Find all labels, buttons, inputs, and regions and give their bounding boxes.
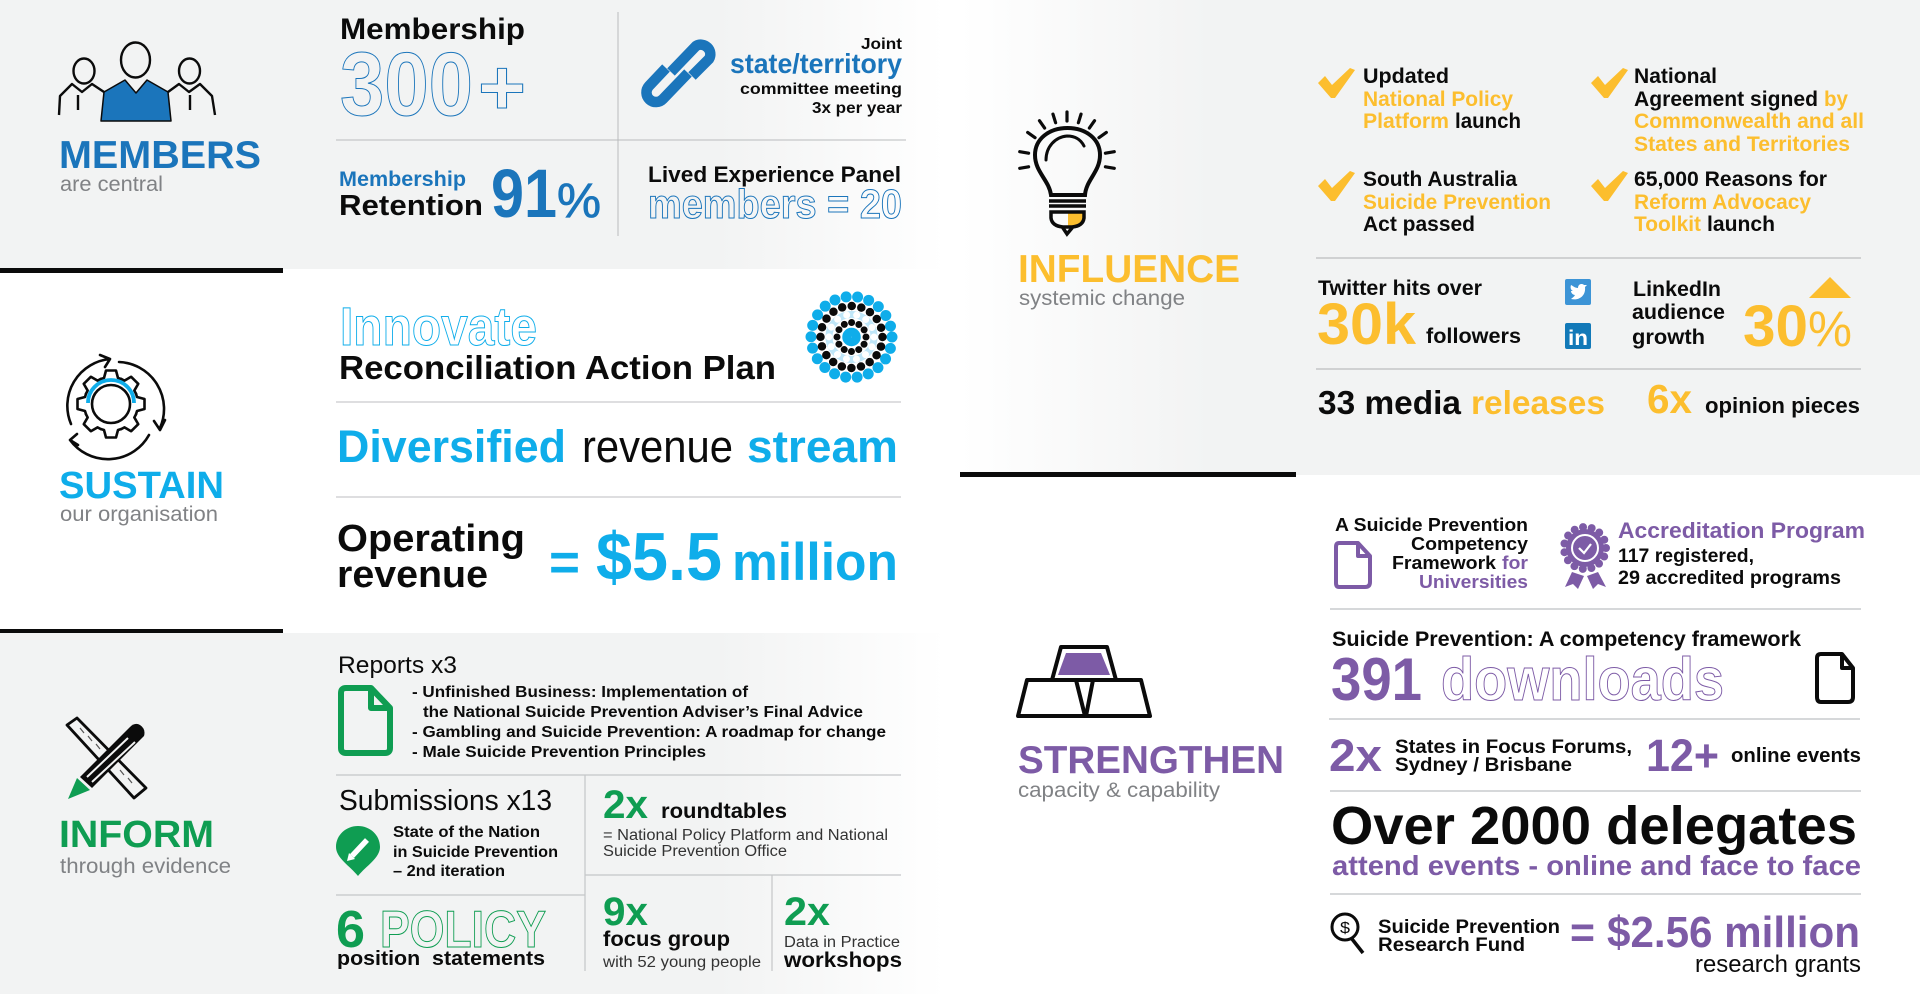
panel: strengthen [1018, 514, 1865, 978]
stat: 9x focus group [602, 890, 761, 971]
item: 65,000 reasons toolkit: Reform Advocacy [1634, 191, 1811, 214]
text: diversified revenue stream: Diversified [337, 421, 566, 472]
text: accreditation program: 117 registered, [1618, 546, 1754, 567]
stat: 6 policy position statements: 6 [336, 901, 365, 959]
item: 65,000 reasons toolkit: Toolkit [1634, 213, 1701, 236]
subheading: our organisation: our organisation [60, 503, 218, 526]
stat: online events [1646, 730, 1861, 781]
stat: operating revenue: $5.5 [596, 519, 722, 595]
stat: research fund: Research Fund [1378, 935, 1525, 956]
panel: inform [0, 633, 945, 994]
icon: check 3 [1318, 171, 1355, 201]
text: state of the nation: – 2nd iteration [393, 863, 505, 880]
stat: operating revenue: Operating [337, 518, 525, 560]
stat: states in focus forums: Sydney / Brisbane [1395, 755, 1572, 776]
panel: sustain [0, 273, 945, 629]
stat: 33 media releases: releases [1471, 384, 1605, 421]
text: joint committee meeting: state/territory [730, 48, 902, 79]
item: national agreement [1634, 65, 1864, 156]
stat: research fund: research grants [1695, 951, 1861, 978]
text: competency framework for universities: for [1502, 552, 1528, 573]
text: state of the nation: State of the Nation [393, 824, 540, 841]
stat: over 2000 delegates: attend events - online and face to face [1332, 850, 1861, 881]
text: diversified revenue stream: revenue [582, 421, 733, 472]
stat: operating revenue [337, 518, 898, 596]
stat: 6x opinion pieces: opinion pieces [1705, 393, 1860, 418]
stat: states in focus forums [1329, 730, 1632, 781]
list: reports: - Gambling and Suicide Prevention: A roadmap for change [412, 724, 886, 741]
stat: 6x opinion pieces: 6x [1647, 376, 1692, 422]
stat: linkedin audience growth: 30 [1743, 294, 1808, 359]
stat: research fund: $2.56 million [1607, 908, 1860, 957]
text: state of the nation [393, 824, 558, 880]
stat: membership 300+ [340, 13, 526, 135]
item: 65,000 reasons toolkit: launch [1707, 213, 1775, 236]
stat: linkedin audience growth: LinkedIn [1633, 278, 1721, 301]
text: innovate reconciliation action plan: Reconciliation Action Plan [339, 349, 776, 386]
stat: 6 policy position statements: position statements [337, 948, 545, 970]
text: joint committee meeting: committee meeting [740, 81, 902, 98]
stat: research fund [1378, 908, 1861, 978]
panel: members [0, 0, 945, 269]
stat: over 2000 delegates: Over 2000 delegates [1331, 796, 1857, 856]
stat: research fund: Suicide Prevention [1378, 917, 1560, 938]
stat: membership retention 91%: Retention [339, 190, 483, 222]
stat: 9x focus group: with 52 young people [602, 954, 761, 971]
item: south australia act: South Australia [1363, 168, 1517, 191]
stat: linkedin audience growth: % [1808, 301, 1852, 357]
icon: gear with arrows [67, 355, 165, 459]
text: diversified revenue stream: stream [747, 421, 898, 472]
text: accreditation program: 29 accredited programs [1618, 568, 1841, 589]
stat: membership 300+: 300 [340, 35, 473, 135]
icon: linkedin [1565, 323, 1591, 350]
text: competency framework for universities: A Suicide Prevention [1335, 514, 1528, 535]
heading: influence: INFLUENCE [1018, 248, 1240, 291]
stat: 2x roundtables: roundtables [661, 800, 787, 823]
text: competency framework for universities: Competency [1411, 533, 1529, 554]
icon: dot artwork circle [811, 296, 892, 378]
text: competency framework for universities: Framework [1392, 552, 1497, 573]
stat: twitter followers [1317, 277, 1521, 357]
text: accreditation program: Accreditation Program [1618, 518, 1865, 543]
item: national policy platform: Platform [1363, 110, 1449, 133]
stat: 2x roundtables: 2x [603, 783, 648, 827]
stat: states in focus forums: 2x [1329, 730, 1382, 781]
stat: membership 300+: Membership [340, 13, 525, 46]
item: national agreement: Commonwealth and all [1634, 110, 1864, 133]
stat: operating revenue: million [732, 533, 898, 592]
text: innovate reconciliation action plan [339, 297, 776, 386]
heading: reports x3: Reports x3 [338, 652, 457, 679]
stat: 2x workshops: Data in Practice [784, 934, 900, 951]
stat: 6x opinion pieces [1647, 376, 1860, 422]
item: national policy platform: National Policy [1363, 88, 1513, 111]
stat: lived experience panel: Lived Experience Panel [648, 162, 901, 187]
stat: 33 media releases [1318, 384, 1605, 421]
item: national policy platform: launch [1455, 110, 1521, 133]
heading: inform: INFORM [59, 814, 214, 856]
stat: 6 policy position statements [336, 901, 546, 970]
stat: 33 media releases: 33 media [1318, 384, 1462, 421]
text: accreditation program [1618, 518, 1865, 589]
item: south australia act: Suicide Prevention [1363, 191, 1551, 214]
stat: research fund: = [1570, 908, 1595, 957]
stat: 391 downloads [1331, 628, 1801, 713]
stat: membership retention 91% [339, 155, 601, 232]
icon: group of people [59, 42, 215, 121]
icon: check 2 [1591, 68, 1628, 98]
item: national agreement: by [1824, 88, 1848, 111]
icon: pencil pin [336, 826, 380, 876]
text: state of the nation: in Suicide Prevention [393, 844, 558, 861]
stat: linkedin audience growth: audience [1632, 301, 1725, 324]
icon: twitter [1565, 279, 1591, 305]
item: south australia act: Act passed [1363, 213, 1475, 236]
stat: membership 300+: + [478, 43, 526, 131]
stat: 2x workshops: workshops [783, 949, 902, 972]
stat: 2x workshops [783, 890, 902, 972]
stat: 391 downloads: Suicide Prevention: A competency framework [1332, 628, 1801, 651]
stat: 391 downloads: downloads [1441, 646, 1724, 713]
icon: gold bars [1018, 647, 1150, 716]
list: reports: - Male Suicide Prevention Principles [412, 744, 706, 761]
stat: twitter followers: Twitter hits over [1318, 277, 1482, 300]
subheading: are central: are central [60, 173, 163, 196]
icon: accreditation rosette [1564, 527, 1606, 589]
heading: submissions x13: Submissions x13 [339, 785, 552, 817]
item: south australia act [1363, 168, 1551, 236]
text: innovate reconciliation action plan: Innovate [340, 297, 537, 357]
stat: membership retention 91%: 91 [491, 155, 557, 232]
stat: 2x roundtables: = National Policy Platform and National [603, 827, 888, 844]
item: national agreement: Agreement signed [1634, 88, 1818, 111]
text: competency framework for universities: Universities [1419, 571, 1528, 592]
subheading: systemic change: systemic change [1019, 287, 1185, 310]
item: national policy platform: Updated [1363, 65, 1449, 88]
item: national policy platform [1363, 65, 1521, 133]
stat: linkedin audience growth [1632, 277, 1852, 359]
text: joint committee meeting: Joint [861, 36, 903, 53]
subheading: through evidence: through evidence [60, 855, 231, 878]
stat: lived experience panel: members = 20 [648, 181, 902, 227]
icon: purple document [1336, 543, 1370, 587]
stat: 9x focus group: focus group [603, 928, 730, 951]
stat: membership retention 91%: % [557, 175, 601, 228]
icon: magnifier with dollar [1332, 914, 1363, 953]
item: 65,000 reasons toolkit [1634, 168, 1827, 236]
icon: light bulb [1020, 112, 1114, 234]
stat: 2x workshops: 2x [784, 890, 830, 934]
stat: twitter followers: 30k [1317, 292, 1417, 357]
stat: 6 policy position statements: POLICY [380, 901, 546, 959]
stat: over 2000 delegates [1331, 796, 1861, 881]
list: reports: - Unfinished Business: Implementation of [412, 684, 749, 701]
subheading: capacity and capability: capacity & capability [1018, 779, 1221, 802]
list: reports: the National Suicide Prevention Adviser’s Final Advice [423, 704, 863, 721]
stat: 2x roundtables: Suicide Prevention Office [603, 843, 787, 860]
item: national agreement: States and Territories [1634, 133, 1850, 156]
icon: chain link [646, 45, 710, 102]
item: 65,000 reasons toolkit: 65,000 Reasons for [1634, 168, 1827, 191]
text: diversified revenue stream [337, 421, 898, 472]
text: competency framework for universities [1335, 514, 1529, 592]
icon: black document [1817, 654, 1853, 702]
heading: sustain: SUSTAIN [59, 465, 224, 507]
stat: online events: 12+ [1646, 730, 1719, 781]
icon: magnifier with dollar: $ [1340, 920, 1350, 937]
list: reports [412, 684, 886, 761]
stat: operating revenue: = [549, 534, 580, 592]
stat: states in focus forums: States in Focus Forums, [1395, 737, 1632, 758]
stat: 9x focus group: 9x [603, 890, 648, 934]
icon: pencil and ruler [67, 718, 146, 799]
stat: membership retention 91%: Membership [339, 168, 466, 191]
stat: online events: online events [1731, 745, 1861, 767]
icon: check 1 [1318, 68, 1355, 98]
icon: check 4 [1591, 171, 1628, 201]
stat: 2x roundtables [603, 783, 888, 860]
item: national agreement: National [1634, 65, 1717, 88]
text: joint committee meeting: 3x per year [812, 100, 902, 117]
panel: influence [960, 0, 1920, 475]
stat: operating revenue: revenue [337, 554, 488, 596]
text: joint committee meeting [730, 36, 903, 117]
heading: members: MEMBERS [59, 134, 261, 177]
stat: linkedin audience growth: growth [1632, 326, 1705, 349]
stat: lived experience panel [648, 162, 902, 227]
heading: strengthen: STRENGTHEN [1018, 739, 1284, 782]
icon: linkedin: in [1568, 327, 1588, 350]
stat: twitter followers: followers [1426, 325, 1521, 348]
icon: green document [341, 688, 390, 753]
stat: 391 downloads: 391 [1331, 646, 1422, 713]
